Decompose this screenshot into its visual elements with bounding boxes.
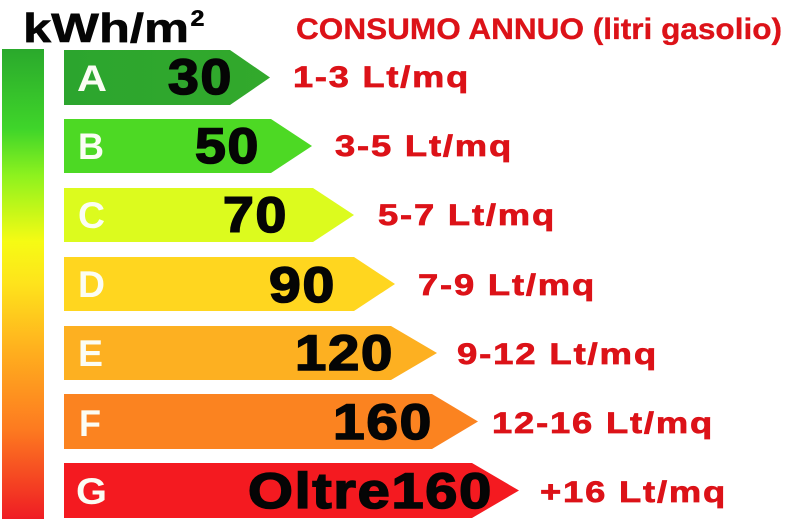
consumption label B: 3-5 Lt/mq (335, 130, 513, 163)
band F: F (79, 403, 101, 444)
band D: 90 (269, 257, 336, 313)
band G (64, 463, 519, 519)
consumption label G: +16 Lt/mq (540, 476, 727, 509)
band B: 50 (195, 118, 260, 174)
band E: 120 (295, 325, 394, 381)
band F: 160 (333, 394, 433, 450)
band C (64, 187, 354, 243)
band E: E (78, 333, 103, 374)
heading: annual consumption: CONSUMO ANNUO (litri gasolio) (296, 13, 782, 46)
band C: 70 (223, 187, 288, 243)
band A: 30 (168, 49, 233, 105)
consumption label C: 5-7 Lt/mq (378, 199, 556, 232)
band G: G (76, 471, 107, 512)
band A (64, 49, 270, 105)
heading: kWh/m² unit: ² (190, 2, 205, 51)
consumption label F: 12-16 Lt/mq (492, 407, 714, 440)
band E (64, 325, 437, 381)
band B: B (78, 126, 104, 167)
consumption label A: 1-3 Lt/mq (293, 61, 470, 94)
band A: A (77, 58, 107, 99)
band C: C (78, 195, 105, 236)
band B (64, 118, 312, 174)
band D (64, 257, 395, 313)
band G: Oltre160 (248, 463, 493, 519)
band D: D (78, 264, 105, 305)
consumption label E: 9-12 Lt/mq (457, 338, 658, 371)
vertical colour scale (2, 49, 44, 519)
consumption label D: 7-9 Lt/mq (418, 269, 596, 302)
band F (64, 394, 478, 450)
heading: kWh/m² unit (23, 2, 205, 51)
heading: kWh/m² unit: kWh/m (23, 5, 189, 51)
